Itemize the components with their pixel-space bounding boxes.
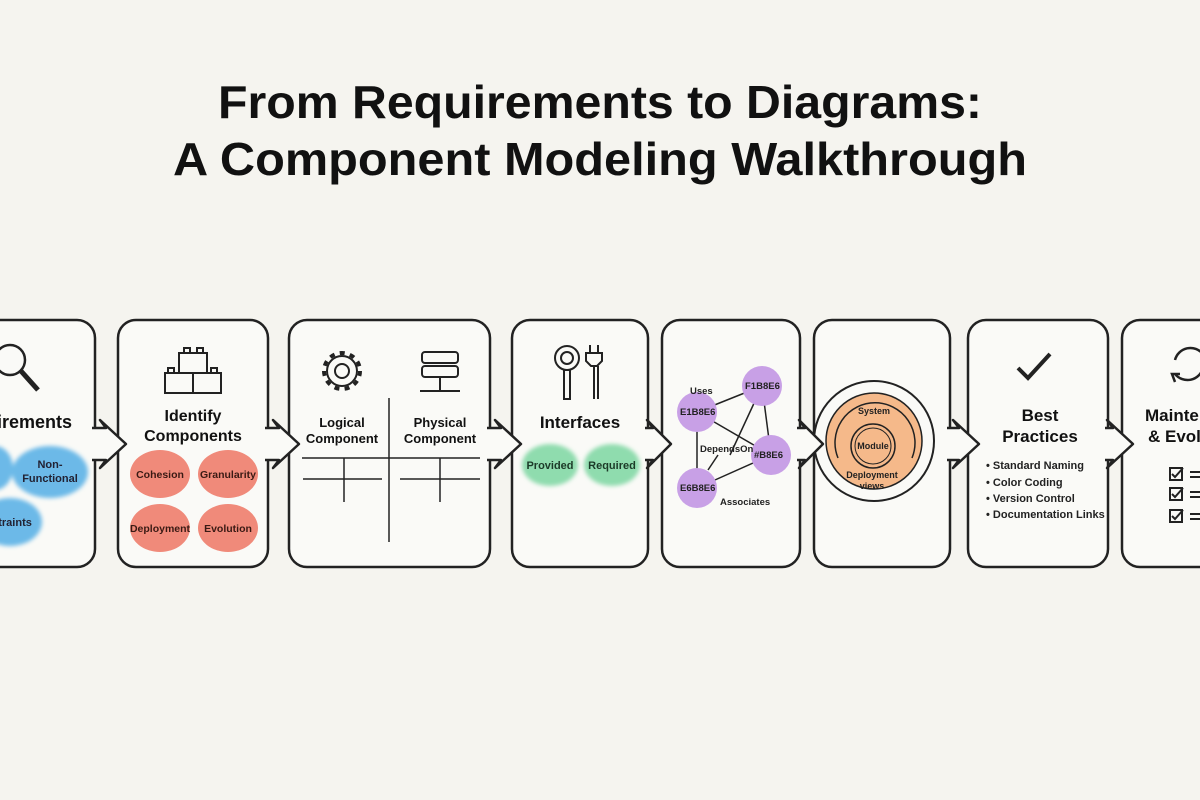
panel: requirements: Non- <box>37 459 63 471</box>
panel: nested views: Module <box>857 441 889 451</box>
arrows between panels <box>92 420 1133 468</box>
panel: nested views: System <box>858 406 890 416</box>
panel: relationships graph: E6B8E6 <box>680 483 715 494</box>
panel: best practices <box>968 320 1108 567</box>
panel: relationships graph: #B8E6 <box>754 450 783 461</box>
panel: relationships graph: F1B8E6 <box>745 381 780 392</box>
panel: best practices: Best <box>1022 406 1059 425</box>
panel: identify components: Components <box>144 428 242 445</box>
panel: best practices: • Standard Naming <box>986 460 1084 472</box>
panel: logical/physical <box>289 320 490 567</box>
title <box>173 76 1027 185</box>
panel: identify components: Cohesion <box>136 469 184 481</box>
icon: checkmark <box>1018 354 1050 378</box>
panel: interfaces: Provided <box>526 460 574 472</box>
panel: best practices: • Documentation Links <box>986 509 1105 521</box>
icon: refresh <box>1172 348 1200 382</box>
panel: identify components: Granularity <box>200 469 256 481</box>
title: A Component Modeling Walkthrough <box>173 133 1027 185</box>
panel: relationships graph: Uses <box>690 386 713 397</box>
panel: nested views <box>814 320 950 567</box>
title: From Requirements to Diagrams: <box>218 76 982 128</box>
icon: blocks <box>165 348 221 393</box>
panel: logical/physical: Logical <box>319 415 365 430</box>
panel: relationships graph: E1B8E6 <box>680 407 715 418</box>
icon: server <box>420 352 460 391</box>
panel: interfaces: Required <box>588 460 636 472</box>
panel: best practices: • Color Coding <box>986 477 1063 489</box>
panel: relationships graph: DependsOn <box>700 444 754 455</box>
panel: identify components: Evolution <box>204 523 252 535</box>
panel: requirements: Functional <box>22 473 78 485</box>
icon: magnifier <box>0 345 38 390</box>
panel: best practices: Practices <box>1002 427 1078 446</box>
panel: requirements <box>0 320 95 567</box>
panel: interfaces <box>512 320 648 567</box>
panel: interfaces: Interfaces <box>540 413 620 432</box>
panel: logical/physical: Component <box>306 431 379 446</box>
panel: relationships graph: Associates <box>720 497 770 508</box>
panel: identify components: Deployment <box>130 523 191 535</box>
panel: nested views: views <box>860 481 884 491</box>
panel: best practices: • Version Control <box>986 493 1075 505</box>
icon: gear <box>324 353 360 389</box>
panel: maintenance <box>1122 320 1200 567</box>
panel: logical/physical: Component <box>404 431 477 446</box>
panel: identify components <box>118 320 268 567</box>
panel: logical/physical: Physical <box>414 415 466 430</box>
panel: maintenance: & Evol <box>1148 427 1200 446</box>
panel: relationships graph <box>662 320 800 567</box>
panel: nested views: Deployment <box>846 470 898 480</box>
panel: identify components: Identify <box>165 408 222 425</box>
icon: lollipop and plug <box>555 345 602 399</box>
